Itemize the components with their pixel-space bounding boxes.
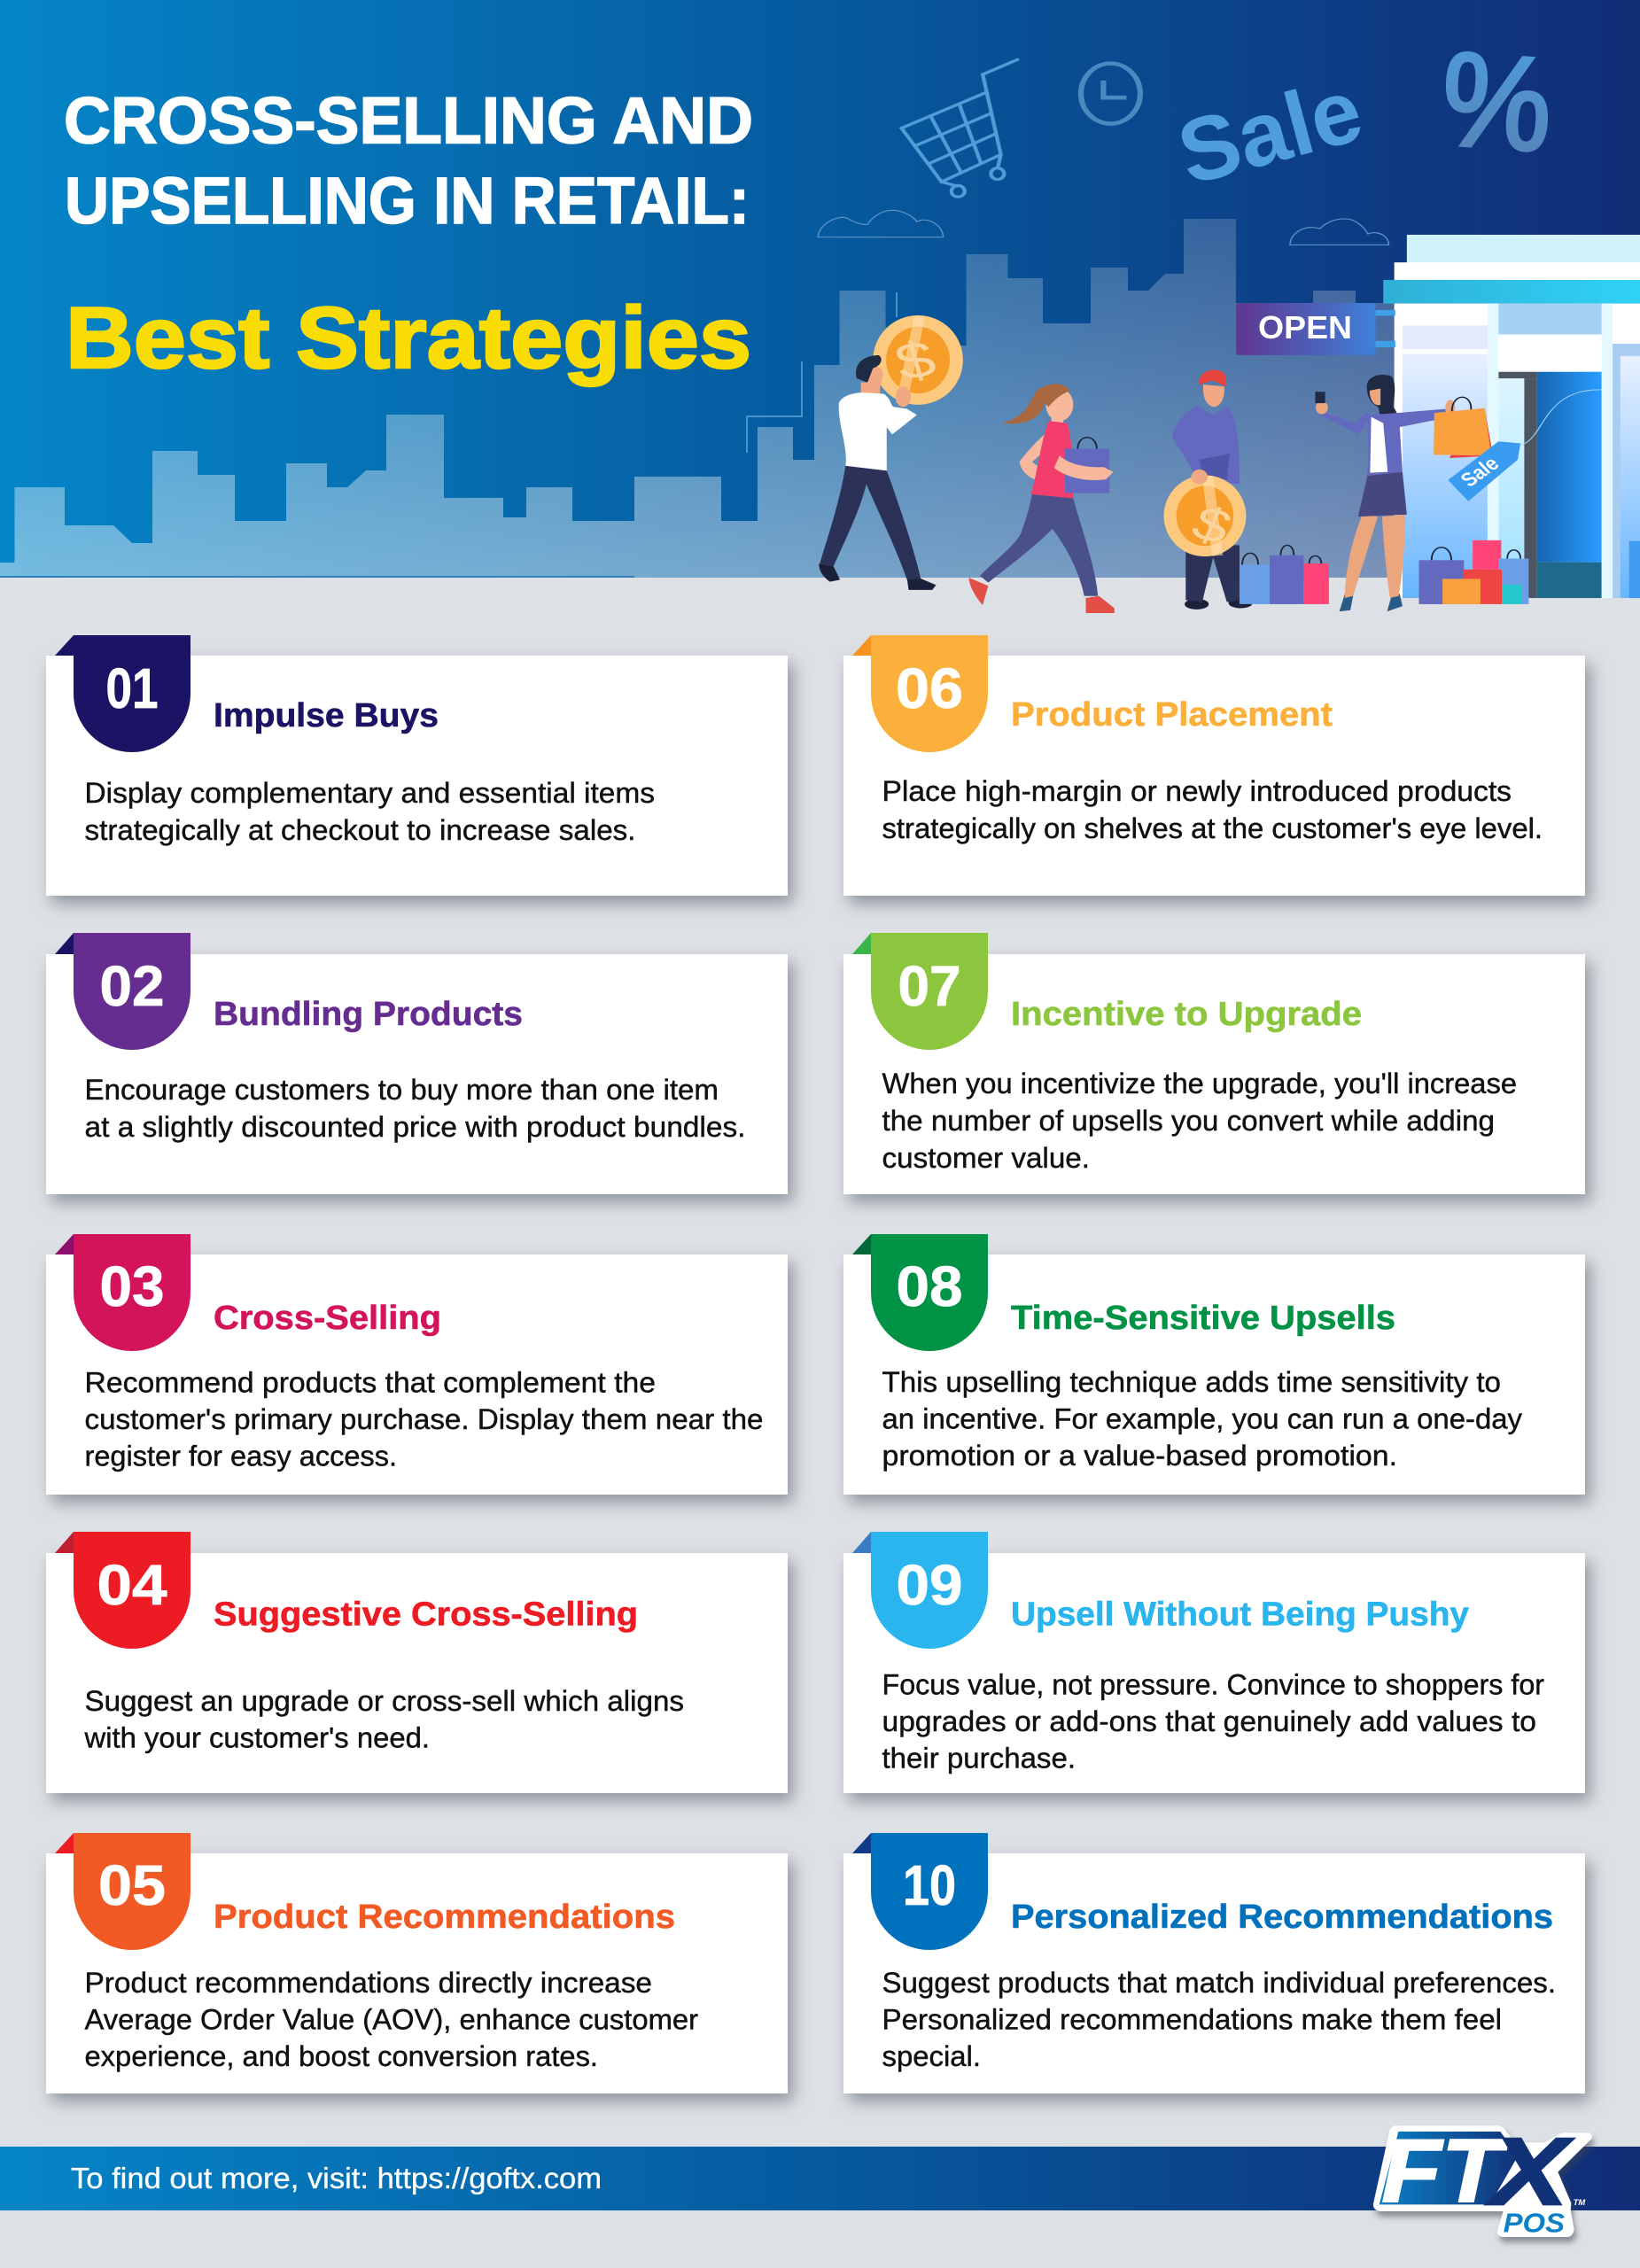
header banner	[0, 0, 1640, 578]
icon: clock	[1081, 64, 1140, 124]
number badge: 03	[99, 1254, 165, 1318]
orange shopping bag	[1434, 397, 1493, 458]
body text	[85, 1074, 746, 1143]
body text	[83, 1685, 684, 1754]
number badge	[852, 1532, 988, 1649]
number badge: 06	[896, 656, 963, 720]
logo FT letters: FT	[1381, 2121, 1509, 2221]
card background	[843, 954, 1585, 1194]
body text: Suggest an upgrade or cross-sell which aligns	[85, 1685, 684, 1717]
number badge	[55, 1833, 190, 1950]
panel: card 01	[46, 635, 788, 896]
panel: card 02	[46, 933, 788, 1194]
body text: Recommend products that complement the	[85, 1366, 656, 1398]
icon: cloud right	[1290, 219, 1388, 245]
icon: percent sign: %	[1437, 23, 1557, 180]
body text: their purchase.	[882, 1742, 1076, 1774]
person: woman with phone	[1315, 375, 1455, 611]
number badge	[852, 933, 988, 1050]
heading: Upsell Without Being Pushy	[1011, 1596, 1469, 1634]
shopping bags group one	[1240, 545, 1329, 604]
icon: sale word: Sale	[1168, 58, 1372, 204]
person: man with coin	[819, 315, 963, 590]
footer bar	[0, 2147, 1640, 2210]
body text: Suggest products that match individual preferences.	[882, 1967, 1556, 1999]
card background	[843, 1853, 1585, 2093]
logo white outline	[1373, 2125, 1592, 2237]
card background	[46, 1254, 788, 1495]
heading: Bundling Products	[214, 996, 523, 1033]
card background	[46, 954, 788, 1194]
heading: Product Recommendations	[214, 1899, 675, 1936]
body text	[882, 775, 1543, 844]
skyline outline accents	[747, 292, 897, 453]
number badge	[55, 635, 190, 752]
subtitle: Best Strategies	[66, 289, 751, 386]
body text: When you incentivize the upgrade, you'll increase	[882, 1068, 1517, 1099]
body text: Focus value, not pressure. Convince to shoppers for	[882, 1669, 1544, 1701]
icon: sale tag: Sale	[1454, 453, 1504, 490]
body text: Encourage customers to buy more than one item	[85, 1074, 719, 1106]
number badge: 10	[903, 1853, 956, 1917]
title	[64, 83, 753, 237]
number badge	[55, 1234, 190, 1351]
body text	[882, 1669, 1544, 1774]
title: CROSS-SELLING AND	[64, 83, 753, 158]
card background	[843, 656, 1585, 896]
body text: the number of upsells you convert while adding	[882, 1105, 1495, 1137]
body text: Product recommendations directly increase	[85, 1967, 652, 1999]
body text: This upselling technique adds time sensitivity to	[882, 1366, 1501, 1398]
footer link text: To find out more, visit: https://goftx.com	[71, 2162, 602, 2194]
body text: strategically at checkout to increase sales.	[85, 814, 636, 846]
logo blue panel	[1380, 2132, 1518, 2204]
body text: Place high-margin or newly introduced products	[882, 775, 1512, 807]
card background	[46, 656, 788, 896]
panel: card 03	[46, 1234, 788, 1495]
title: UPSELLING IN RETAIL:	[65, 164, 750, 237]
trademark mark: TM	[1574, 2198, 1585, 2207]
body text: special.	[882, 2040, 981, 2072]
body text: Average Order Value (AOV), enhance customer	[85, 2004, 698, 2036]
body text	[882, 1068, 1517, 1174]
body text: strategically on shelves at the customer's eye level.	[882, 812, 1543, 844]
number badge	[55, 933, 190, 1050]
body text	[85, 1967, 698, 2072]
city skyline	[0, 219, 1418, 578]
heading: Personalized Recommendations	[1011, 1899, 1553, 1936]
open sign	[1236, 303, 1395, 355]
number badge	[852, 635, 988, 752]
person: man in red hat with coin	[1164, 369, 1253, 610]
number badge	[852, 1833, 988, 1950]
card background	[46, 1853, 788, 2093]
heading: Incentive to Upgrade	[1011, 996, 1362, 1033]
person: running woman with bag	[969, 384, 1115, 613]
body text: Display complementary and essential items	[85, 777, 655, 809]
illustration: shoppers and store	[818, 59, 1640, 613]
open sign: OPEN	[1258, 309, 1352, 346]
heading: Impulse Buys	[214, 697, 439, 734]
number badge: 05	[98, 1853, 166, 1917]
card background	[843, 1254, 1585, 1495]
body text	[882, 1366, 1522, 1472]
number badge: 02	[99, 954, 165, 1018]
heading: Product Placement	[1011, 696, 1333, 734]
heading: Cross-Selling	[214, 1300, 441, 1337]
heading: Suggestive Cross-Selling	[214, 1596, 638, 1634]
number badge: 08	[897, 1254, 962, 1318]
panel: card 08	[843, 1234, 1585, 1495]
body text	[882, 1967, 1556, 2072]
panel: card 06	[843, 635, 1585, 896]
person: man with coin: $	[889, 330, 942, 392]
number badge: 04	[97, 1553, 167, 1617]
body text	[85, 777, 655, 846]
number badge: 07	[898, 954, 960, 1018]
number badge	[852, 1234, 988, 1351]
body text: customer's primary purchase. Display them near the	[85, 1403, 764, 1435]
person: man in red hat with coin: $	[1184, 496, 1240, 555]
icon: shopping cart	[901, 59, 1019, 197]
logo POS text: POS	[1504, 2208, 1566, 2238]
logo: FTX POS	[1373, 2117, 1592, 2238]
body text: at a slightly discounted price with product bundles.	[85, 1111, 746, 1143]
card background	[46, 1553, 788, 1793]
panel: card 10	[843, 1833, 1585, 2093]
logo X letter: X	[1486, 2117, 1574, 2225]
header gradient background	[0, 0, 1640, 578]
store	[1383, 235, 1640, 598]
shopping bags group two	[1418, 540, 1528, 604]
body text: customer value.	[882, 1142, 1090, 1174]
icon: cloud left	[818, 210, 944, 237]
body text: upgrades or add-ons that genuinely add values to	[882, 1705, 1536, 1737]
body text: an incentive. For example, you can run a one-day	[882, 1403, 1522, 1435]
card background	[843, 1553, 1585, 1793]
number badge	[55, 1532, 190, 1649]
number badge: 09	[897, 1553, 962, 1617]
body text: register for easy access.	[85, 1441, 397, 1472]
panel: card 04	[46, 1532, 788, 1793]
panel: card 05	[46, 1833, 788, 2093]
heading: Time-Sensitive Upsells	[1011, 1300, 1395, 1337]
body text: promotion or a value-based promotion.	[882, 1440, 1397, 1472]
body text: with your customer's need.	[83, 1722, 430, 1754]
ground line	[0, 576, 634, 578]
panel: card 09	[843, 1532, 1585, 1793]
body text	[85, 1366, 764, 1472]
icon: sale tag	[1448, 390, 1602, 501]
body text: experience, and boost conversion rates.	[85, 2040, 598, 2072]
panel: card 07	[843, 933, 1585, 1194]
number badge: 01	[106, 656, 158, 720]
body text: Personalized recommendations make them feel	[882, 2004, 1502, 2036]
footer gradient background	[0, 2147, 1640, 2210]
